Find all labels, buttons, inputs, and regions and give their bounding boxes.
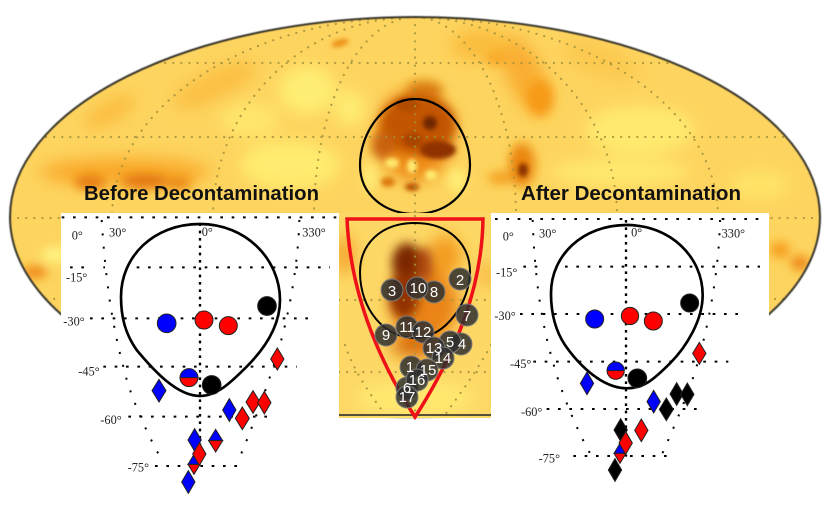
chart: after decontamination: -15° <box>496 266 517 280</box>
chart: before decontamination: 0° <box>202 225 213 239</box>
numbered markers: 10 <box>410 280 426 297</box>
numbered markers: 15 <box>420 362 436 379</box>
chart: after decontamination: -60° <box>521 405 542 419</box>
heading: after: After Decontamination <box>521 183 741 205</box>
numbered markers: 11 <box>399 319 415 336</box>
chart: before decontamination: 330° <box>302 226 326 240</box>
chart: before decontamination: -75° <box>128 460 149 474</box>
numbered markers: 6 <box>403 380 411 397</box>
chart: after decontamination: -75° <box>539 452 560 466</box>
numbered markers <box>375 268 478 408</box>
numbered markers: 14 <box>435 350 451 367</box>
heading: before: Before Decontamination <box>84 183 319 205</box>
sky map <box>10 17 820 314</box>
chart: before decontamination <box>62 217 338 493</box>
map outline <box>10 17 820 417</box>
chart: before decontamination: 30° <box>109 226 126 240</box>
numbered markers: 1 <box>406 359 414 376</box>
chart: after decontamination: -30° <box>494 309 516 323</box>
chart: after decontamination <box>494 219 767 481</box>
chart: before decontamination: -60° <box>100 413 122 427</box>
numbered markers: 7 <box>463 308 471 325</box>
grid lines <box>10 18 813 300</box>
panel: center map crop <box>337 213 494 418</box>
upper egg contour <box>360 99 470 214</box>
red wedge outline <box>347 219 483 417</box>
lower egg contour <box>360 223 470 338</box>
chart: after decontamination: 0° <box>503 230 514 244</box>
numbered markers: 16 <box>409 372 425 389</box>
numbered markers: 13 <box>426 340 442 357</box>
chart: after decontamination: -45° <box>510 357 531 371</box>
panel: after white background <box>491 213 769 508</box>
chart: after decontamination: 330° <box>722 226 745 240</box>
numbered markers: 17 <box>399 389 415 406</box>
numbered markers: 5 <box>446 334 454 351</box>
numbered markers: 9 <box>382 327 390 344</box>
chart: after decontamination: 30° <box>539 226 556 240</box>
panel: before white background <box>61 213 339 508</box>
numbered markers: 8 <box>430 284 438 301</box>
chart: before decontamination: -45° <box>78 365 100 379</box>
numbered markers: 2 <box>456 272 464 289</box>
numbered markers: 4 <box>458 336 466 353</box>
chart: before decontamination: 0° <box>72 228 83 242</box>
numbered markers: 12 <box>415 324 431 341</box>
numbered markers: 3 <box>388 283 396 300</box>
chart: after decontamination: 0° <box>631 226 642 240</box>
chart: before decontamination: -30° <box>63 315 85 329</box>
chart: before decontamination: -15° <box>66 270 87 284</box>
